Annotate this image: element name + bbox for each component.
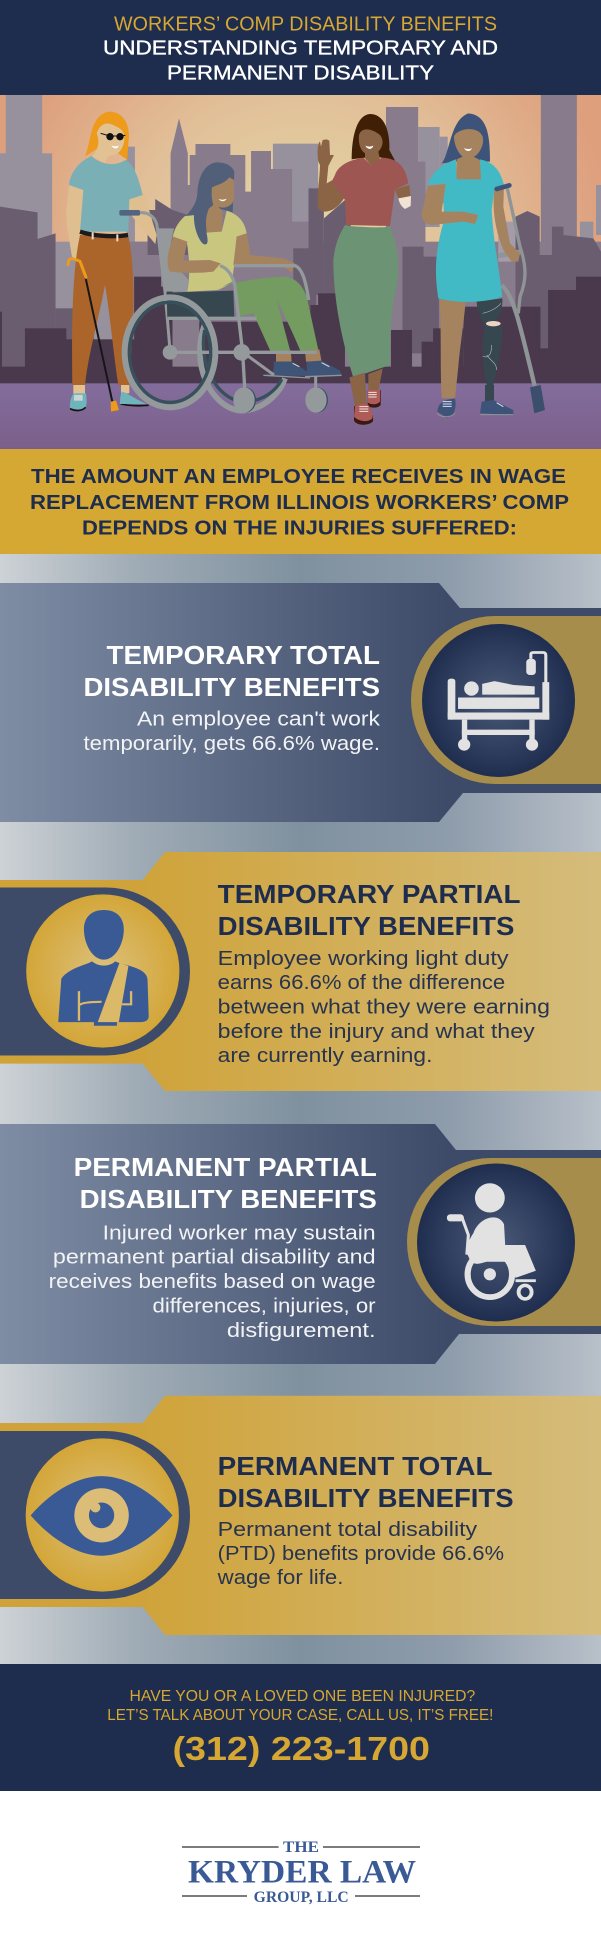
- header eyebrow: WORKERS’ COMP DISABILITY BENEFITS: [114, 14, 497, 36]
- wheelchair wheels and frame: [125, 266, 317, 407]
- intro banner: [0, 449, 601, 554]
- panel 4 heading: [218, 1451, 514, 1513]
- panel 3 description: [49, 1222, 376, 1342]
- panel 4 description: Permanent total disability: [218, 1518, 478, 1541]
- footer message: [107, 1688, 493, 1724]
- panel 1 description: An employee can't work: [137, 708, 381, 731]
- panel 3 description: receives benefits based on wage: [49, 1270, 376, 1293]
- phone number: (312) 223-1700: [172, 1730, 430, 1767]
- panel 4 description: wage for life.: [217, 1566, 343, 1589]
- header panel: [0, 0, 601, 95]
- header title: PERMANENT DISABILITY: [167, 63, 434, 85]
- panel: permanent total disability benefits: [0, 1396, 601, 1635]
- panel: permanent partial disability benefits: [0, 1124, 601, 1364]
- panel 2 heading: [218, 879, 521, 941]
- panel 2 description: are currently earning.: [218, 1044, 432, 1067]
- panel 1 description: temporarily, gets 66.6% wage.: [84, 732, 380, 755]
- icon: person with arm sling: [26, 894, 179, 1048]
- wheelchair back frame: [138, 213, 285, 411]
- panel 2 description: [218, 947, 550, 1067]
- panel 2 description: between what they were earning: [218, 995, 550, 1018]
- icon: hospital bed: [422, 624, 575, 777]
- panel 2 description: Employee working light duty: [218, 947, 509, 970]
- header title: UNDERSTANDING TEMPORARY AND: [103, 38, 498, 60]
- intro banner: REPLACEMENT FROM ILLINOIS WORKERS’ COMP: [30, 492, 569, 514]
- panel: temporary partial disability benefits: [0, 852, 601, 1091]
- panel 2 description: before the injury and what they: [218, 1020, 536, 1043]
- panel 4 description: (PTD) benefits provide 66.6%: [218, 1542, 504, 1565]
- panel 1 heading: DISABILITY BENEFITS: [84, 672, 380, 702]
- panel 1 heading: TEMPORARY TOTAL: [106, 640, 380, 670]
- panel 3 heading: DISABILITY BENEFITS: [80, 1184, 377, 1214]
- panel 3 description: disfigurement.: [227, 1319, 376, 1342]
- city skyline: [0, 95, 601, 450]
- person: woman with prosthetic leg and crutch: [422, 113, 545, 418]
- illustration: four women with disabilities in front of a city skyline: [0, 95, 601, 450]
- panel 2 heading: DISABILITY BENEFITS: [218, 911, 514, 941]
- logo: The Kryder Law Group, LLC: [182, 1839, 420, 1906]
- logo: The Kryder Law Group, LLC: THE: [283, 1839, 319, 1856]
- person: blind woman with cane: [66, 112, 157, 412]
- panel 4 description: [217, 1518, 504, 1589]
- panel 3 heading: [74, 1152, 377, 1214]
- panel 2 heading: TEMPORARY PARTIAL: [218, 879, 521, 909]
- logo: The Kryder Law Group, LLC: KRYDER LAW: [188, 1855, 416, 1891]
- logo: The Kryder Law Group, LLC: GROUP, LLC: [254, 1889, 349, 1906]
- person: woman waving with bandaged arm: [318, 114, 411, 425]
- page background: steel band: [0, 554, 601, 1664]
- panel 2 description: earns 66.6% of the difference: [218, 971, 505, 994]
- ground: [0, 383, 601, 449]
- panel 3 description: differences, injuries, or: [152, 1294, 376, 1318]
- intro banner: THE AMOUNT AN EMPLOYEE RECEIVES IN WAGE: [31, 466, 566, 488]
- panel 1 description: [84, 708, 381, 755]
- panel 4 heading: DISABILITY BENEFITS: [218, 1483, 514, 1513]
- footer message: HAVE YOU OR A LOVED ONE BEEN INJURED?: [130, 1688, 476, 1705]
- footer message: LET’S TALK ABOUT YOUR CASE, CALL US, IT’S FREE!: [107, 1707, 493, 1724]
- icon: eye: [26, 1438, 179, 1592]
- header title: [103, 38, 498, 85]
- panel 3 description: Injured worker may sustain: [103, 1222, 376, 1245]
- person: woman in wheelchair: [119, 162, 342, 413]
- footer call to action: [0, 1664, 601, 1791]
- panel 3 description: permanent partial disability and: [53, 1246, 376, 1269]
- panel: temporary total disability benefits: [0, 583, 601, 822]
- intro banner: DEPENDS ON THE INJURIES SUFFERED:: [82, 518, 517, 540]
- panel 4 heading: PERMANENT TOTAL: [218, 1451, 493, 1481]
- panel 3 heading: PERMANENT PARTIAL: [74, 1152, 377, 1182]
- icon: person in wheelchair: [417, 1164, 575, 1322]
- panel 1 heading: [84, 640, 380, 702]
